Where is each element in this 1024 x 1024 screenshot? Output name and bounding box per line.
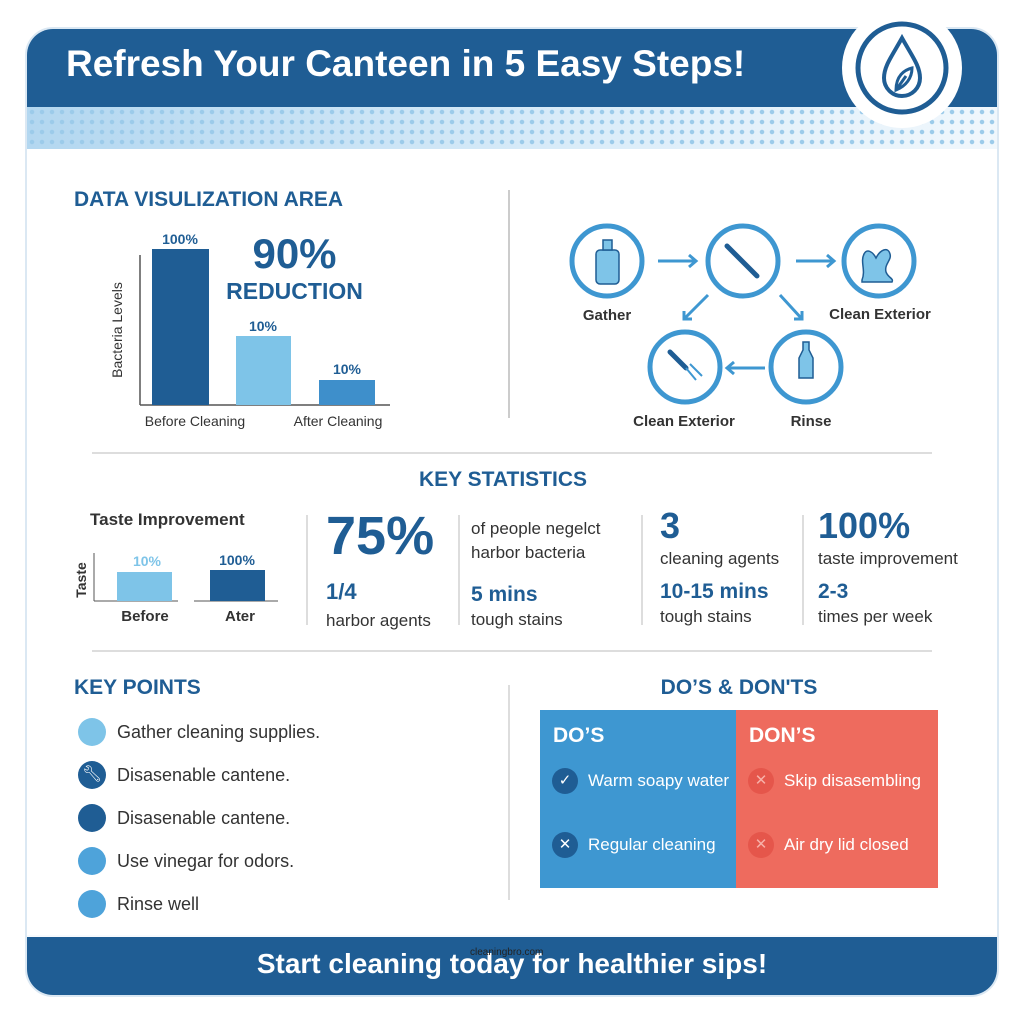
stat: 100%: 2-3 bbox=[818, 580, 848, 603]
stat: 100% bbox=[818, 505, 958, 626]
bar chart: bacteria: 10% bbox=[333, 361, 362, 377]
panel: don'ts: DON’S bbox=[749, 724, 816, 747]
panel: do's: Warm soapy water bbox=[588, 771, 729, 790]
icon: logo drop leaf bbox=[842, 8, 962, 128]
bar chart: bacteria bbox=[109, 231, 390, 429]
stat: 3: cleaning agents bbox=[660, 549, 779, 568]
chart: taste improvement: 100% bbox=[219, 552, 255, 568]
process diagram: Gather bbox=[583, 307, 631, 324]
list: key points: Disasenable cantene. bbox=[117, 808, 290, 828]
bar chart: bacteria: Bacteria Levels bbox=[109, 282, 125, 378]
chart: taste improvement: Taste bbox=[73, 562, 89, 598]
process diagram: Clean Exterior bbox=[829, 306, 931, 323]
stat: 75%: 75% bbox=[326, 506, 434, 566]
chart: taste improvement: 10% bbox=[133, 553, 162, 569]
watermark: cleaningbro.com bbox=[470, 947, 543, 958]
chart: taste improvement: Taste Improvement bbox=[90, 510, 245, 529]
stat: of people: tough stains bbox=[471, 610, 563, 629]
stat: of people: of people negelct bbox=[471, 519, 600, 538]
bar chart: bacteria: After Cleaning bbox=[294, 413, 382, 429]
stat: 75%: 1/4 bbox=[326, 579, 357, 604]
stat: 3: 10-15 mins bbox=[660, 580, 769, 603]
heading: key statistics: KEY STATISTICS bbox=[419, 468, 587, 491]
stat: 3: 3 bbox=[660, 505, 680, 546]
bar chart: bacteria: 100% bbox=[162, 231, 198, 247]
list: key points bbox=[78, 718, 320, 918]
list: key points: Rinse well bbox=[117, 894, 199, 914]
header band bbox=[27, 29, 1001, 107]
stat: of people bbox=[471, 519, 600, 629]
panel: do's: ✓ bbox=[559, 772, 571, 789]
callout: 90% reduction: REDUCTION bbox=[226, 278, 363, 304]
process diagram bbox=[570, 224, 931, 430]
stat: 75%: harbor agents bbox=[326, 611, 431, 630]
stat: of people: harbor bacteria bbox=[471, 543, 585, 562]
chart: taste improvement bbox=[73, 510, 278, 625]
list: key points: Disasenable cantene. bbox=[117, 764, 290, 784]
body panel bbox=[27, 149, 997, 935]
panel: do's: Regular cleaning bbox=[588, 835, 716, 854]
callout: 90% reduction: 90% bbox=[252, 230, 337, 277]
panel: do's bbox=[540, 710, 736, 888]
list: key points: Use vinegar for odors. bbox=[117, 850, 294, 870]
list: key points: Gather cleaning supplies. bbox=[117, 722, 320, 742]
stat: 3 bbox=[660, 505, 779, 626]
dotted band bbox=[27, 107, 1001, 151]
callout: 90% reduction bbox=[226, 230, 363, 304]
stat: 100%: 100% bbox=[818, 505, 910, 546]
stat: of people: 5 mins bbox=[471, 583, 538, 606]
bar chart: bacteria: 10% bbox=[249, 318, 278, 334]
panel: don'ts: ✕ bbox=[755, 836, 767, 853]
footer band bbox=[27, 937, 1001, 999]
stat: 100%: taste improvement bbox=[818, 549, 958, 568]
heading: key points: KEY POINTS bbox=[74, 676, 201, 699]
panel: don'ts: Air dry lid closed bbox=[784, 835, 909, 854]
process diagram: Rinse bbox=[791, 413, 831, 430]
list: key points: 🔧︎ bbox=[82, 766, 102, 783]
chart: taste improvement: Before bbox=[121, 608, 169, 625]
panel: do's: ✕ bbox=[559, 836, 571, 853]
stat: 3: tough stains bbox=[660, 607, 752, 626]
heading: data visualization: DATA VISULIZATION AREA bbox=[74, 188, 343, 211]
stat: 75% bbox=[326, 506, 434, 630]
panel: do's: DO’S bbox=[553, 724, 604, 747]
heading: do's and don'ts: DO’S & DON'TS bbox=[661, 676, 817, 699]
stat: 100%: times per week bbox=[818, 607, 932, 626]
title: Refresh Your Canteen in 5 Easy Steps! bbox=[66, 43, 745, 84]
panel: don'ts: ✕ bbox=[755, 772, 767, 789]
chart: taste improvement: Ater bbox=[225, 608, 255, 625]
panel: don'ts bbox=[736, 710, 938, 888]
bar chart: bacteria: Before Cleaning bbox=[145, 413, 245, 429]
panel: don'ts: Skip disasembling bbox=[784, 771, 921, 790]
footer text: Start cleaning today for healthier sips! bbox=[257, 948, 767, 979]
process diagram: Clean Exterior bbox=[633, 413, 735, 430]
